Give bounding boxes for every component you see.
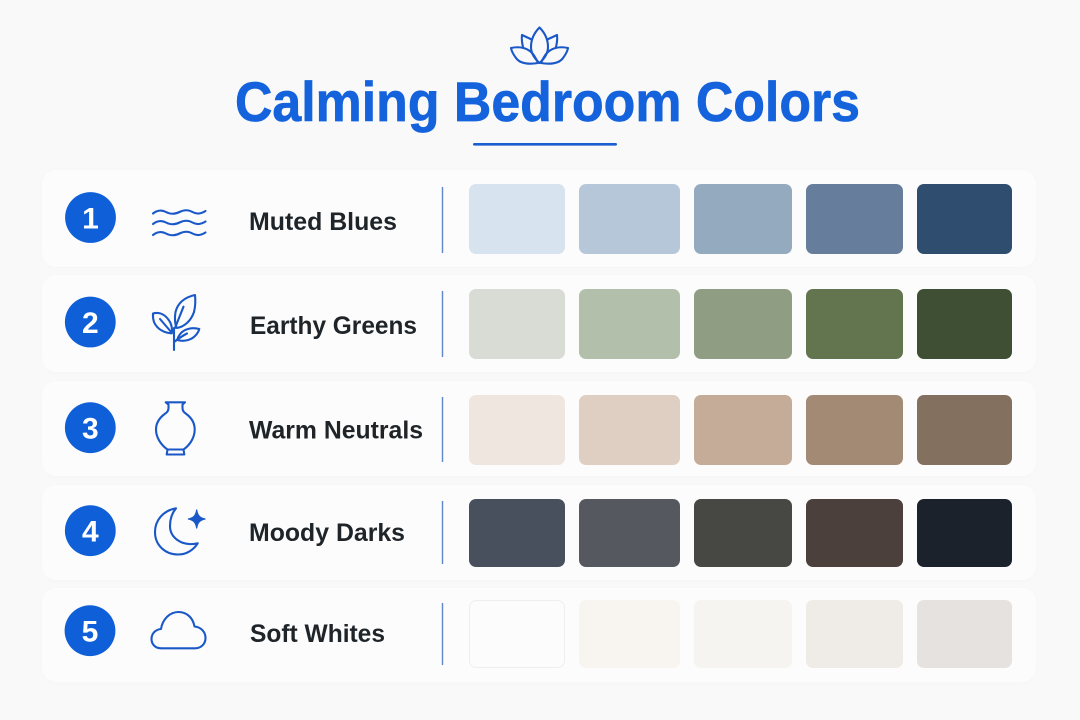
- number badge 3: [65, 402, 116, 453]
- panel: row 4 Moody Darks: [42, 485, 1036, 580]
- number badge 5: [65, 605, 115, 656]
- panel: row 3 Warm Neutrals: [42, 381, 1036, 476]
- number badge 2: 2: [82, 307, 99, 340]
- number badge 4: 4: [82, 516, 99, 549]
- icon: moon and star: [155, 508, 205, 554]
- title underline: [473, 143, 617, 146]
- label: Soft Whites: [250, 620, 385, 648]
- swatches: [469, 395, 1012, 465]
- panel: row 2 Earthy Greens: [42, 275, 1036, 372]
- number badge 4: [65, 505, 116, 556]
- icon: vase: [156, 402, 195, 454]
- label: Muted Blues: [249, 208, 397, 236]
- number badge 1: 1: [82, 202, 99, 236]
- number badge 2: [65, 297, 116, 347]
- number badge 5: 5: [82, 616, 98, 649]
- swatches: [469, 184, 1012, 254]
- swatches: [469, 499, 1012, 567]
- number badge 1: [65, 192, 116, 243]
- panel: row 5 Soft Whites: [42, 588, 1036, 682]
- number badge 3: 3: [82, 413, 99, 446]
- icon: lotus: [511, 28, 568, 64]
- icon: leaves: [153, 295, 199, 350]
- swatches: [469, 289, 1012, 359]
- title: Calming Bedroom Colors: [235, 70, 860, 133]
- icon: waves: [153, 210, 206, 235]
- panel: row 1 Muted Blues: [42, 170, 1036, 267]
- icon: cloud: [152, 612, 206, 648]
- label: Warm Neutrals: [249, 417, 423, 445]
- label: Earthy Greens: [250, 312, 417, 340]
- label: Moody Darks: [249, 519, 405, 547]
- swatches: [470, 600, 1012, 668]
